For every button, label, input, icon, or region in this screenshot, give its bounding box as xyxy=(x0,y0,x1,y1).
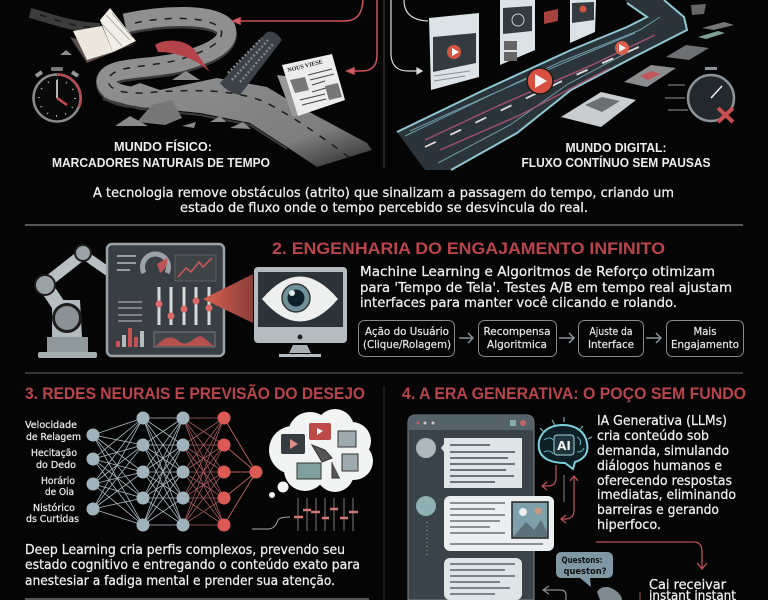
text block: section 4 description: demanda, simulando xyxy=(597,443,729,459)
icon: user silhouette xyxy=(597,587,622,600)
icon: AI brain: AI xyxy=(557,439,571,453)
heading: physical world caption xyxy=(52,139,270,170)
step: user action xyxy=(358,320,454,356)
text block: bottom caption xyxy=(649,577,736,600)
arrow: white arrow to screen xyxy=(391,0,422,74)
heading: section 3: 3. REDES NEURAIS E PREVISÃO DO DESEJO xyxy=(25,383,365,403)
icon: video card 1 xyxy=(429,13,479,90)
text block: bottom caption: Cai receivar xyxy=(649,577,726,593)
step: more engagement: Engajamento xyxy=(671,339,739,351)
heading: section 2: 2. ENGENHARIA DO ENGAJAMENTO INFINITO xyxy=(272,239,665,258)
chart: bars xyxy=(116,328,144,347)
text block: section 3 description: anestesiar a fadiga mental e prender sua atenção. xyxy=(25,573,335,589)
callout: question bubble: Questons: xyxy=(562,556,602,566)
icon: video card 2 xyxy=(500,0,535,65)
text block: section 4 description: imediatas, eliminando xyxy=(597,487,736,503)
text block: section 3 description: estado cognitivo e entregando o conteúdo exato para xyxy=(25,557,360,573)
step: algorithmic reward: Recompensa xyxy=(484,326,550,338)
step: algorithmic reward xyxy=(478,320,556,356)
text block: section 4 description: hiperfoco. xyxy=(597,517,661,533)
heading: physical world caption: MARCADORES NATURAIS DE TEMPO xyxy=(52,155,270,170)
callout: question bubble: queston? xyxy=(564,567,607,577)
icon: stopwatch xyxy=(34,67,81,122)
heading: digital world caption: FLUXO CONTÍNUO SEM PAUSAS xyxy=(522,155,711,170)
message: first chat bubble xyxy=(416,438,522,488)
panel: control dashboard xyxy=(107,244,224,356)
road: digital highway xyxy=(397,0,687,170)
arrow: red light beam xyxy=(203,274,253,323)
text block: section 3 description xyxy=(25,542,360,589)
text block: section 3 description: Deep Learning cria perfis complexos, prevendo seu xyxy=(25,542,345,558)
text block: neural network input labels: Velocidade xyxy=(25,420,77,431)
heading: digital world caption: MUNDO DIGITAL: xyxy=(566,140,666,155)
text block: neural network input labels: ds Curtidas xyxy=(26,514,79,525)
text block: section 4 description: IA Generativa (LLMs) xyxy=(597,413,727,429)
icon: red play button xyxy=(527,68,553,94)
flow diagram: engagement loop xyxy=(358,320,744,356)
icon: newspaper xyxy=(277,54,345,117)
callout: question bubble xyxy=(556,552,613,587)
icon: small cards along road xyxy=(561,4,734,127)
panel: physical world road illustration xyxy=(30,8,372,167)
icon: open book xyxy=(70,8,138,63)
text block: section 4 description: diálogos humanos e xyxy=(597,458,722,474)
chart: neural network xyxy=(86,412,262,532)
text block: section 4 description: oferecendo respostas xyxy=(597,473,732,489)
text block: friction summary xyxy=(93,185,674,216)
chart: area xyxy=(154,332,215,347)
arrow: white arrow to screen top xyxy=(404,0,428,21)
text block: section 2 description xyxy=(360,264,732,311)
icon: newspaper: NOUS VIESE xyxy=(287,59,323,74)
arrow: step 3 to 4 xyxy=(646,333,661,343)
text block: neural network input labels: de Relagem xyxy=(26,432,81,443)
panel: chat window xyxy=(408,415,554,600)
icon: small play button xyxy=(615,41,629,55)
message: second chat bubble with image xyxy=(416,496,554,551)
icon: robot arm xyxy=(35,245,136,358)
panel: digital world highway illustration xyxy=(397,0,734,170)
arrow: step 2 to 3 xyxy=(559,333,574,343)
text block: section 4 description: barreiras e gerando xyxy=(597,502,719,518)
text block: friction summary: A tecnologia remove obstáculos (atrito) que sinalizam a passagem do tempo, criando um xyxy=(93,185,674,201)
icon: broken road rocks xyxy=(60,50,251,129)
text block: neural network input labels: Horário xyxy=(41,476,75,487)
text block: section 2 description: Machine Learning e Algoritmos de Reforço otimizam xyxy=(360,264,715,280)
chart: sliders xyxy=(156,287,212,325)
heading: digital world caption xyxy=(522,140,711,170)
step: user action: (Clique/Rolagem) xyxy=(363,339,451,351)
text block: friction summary: estado de fluxo onde o tempo percebido se desvincula do real. xyxy=(180,200,588,216)
icon: AI brain xyxy=(539,417,592,469)
text block: section 2 description: para 'Tempo de Tela'. Testes A/B em tempo real ajustam xyxy=(360,280,732,296)
icon: monitor with eye xyxy=(254,267,347,357)
icon: thought cloud with content xyxy=(269,409,373,498)
arrow: grey curved arrow xyxy=(543,586,566,600)
text block: section 2 description: interfaces para manter você ciicando e rolando. xyxy=(360,295,677,311)
text block: neural network input labels: Hecitação xyxy=(31,448,77,459)
step: more engagement: Mais xyxy=(694,326,716,338)
icon: torn red marker xyxy=(155,41,210,72)
text block: neural network input labels: de Oia xyxy=(45,487,74,498)
step: interface adjustment xyxy=(578,320,644,356)
step: interface adjustment: Ajuste da xyxy=(590,326,632,338)
chart: small equalizer xyxy=(252,498,358,531)
road: winding road xyxy=(30,13,372,167)
arrow: red arrow to road xyxy=(233,0,363,24)
icon: remote control xyxy=(220,32,282,95)
step: interface adjustment: Interface xyxy=(588,339,634,351)
message: third chat bubble xyxy=(444,558,522,600)
icon: gauge xyxy=(142,254,168,273)
heading: physical world caption: MUNDO FÍSICO: xyxy=(114,139,212,154)
text block: section 4 description: cria conteúdo sob xyxy=(597,428,709,444)
arrow: step 1 to 2 xyxy=(459,333,473,343)
arrow: red double arrow to bubble xyxy=(561,476,578,523)
chart: line chart xyxy=(175,255,216,281)
heading: section 4: 4. A ERA GENERATIVA: O POÇO SEM FUNDO xyxy=(402,384,746,403)
text block: neural network input labels: do Dedo xyxy=(36,460,76,471)
step: algorithmic reward: Algoritmica xyxy=(487,339,547,351)
text block: section 4 description xyxy=(597,413,736,533)
step: user action: Ação do Usuário xyxy=(365,326,449,338)
icon: stopwatch crossed xyxy=(665,67,734,122)
arrow: red curved arrow from brain xyxy=(542,465,556,490)
text block: neural network input labels xyxy=(25,420,81,525)
text block: neural network input labels: Nistórico xyxy=(33,503,75,514)
step: more engagement xyxy=(666,320,744,356)
arrow: red arrow to caption xyxy=(596,542,707,569)
icon: video card 3 xyxy=(544,0,596,43)
arrow: red arrow to newspaper xyxy=(347,0,377,74)
